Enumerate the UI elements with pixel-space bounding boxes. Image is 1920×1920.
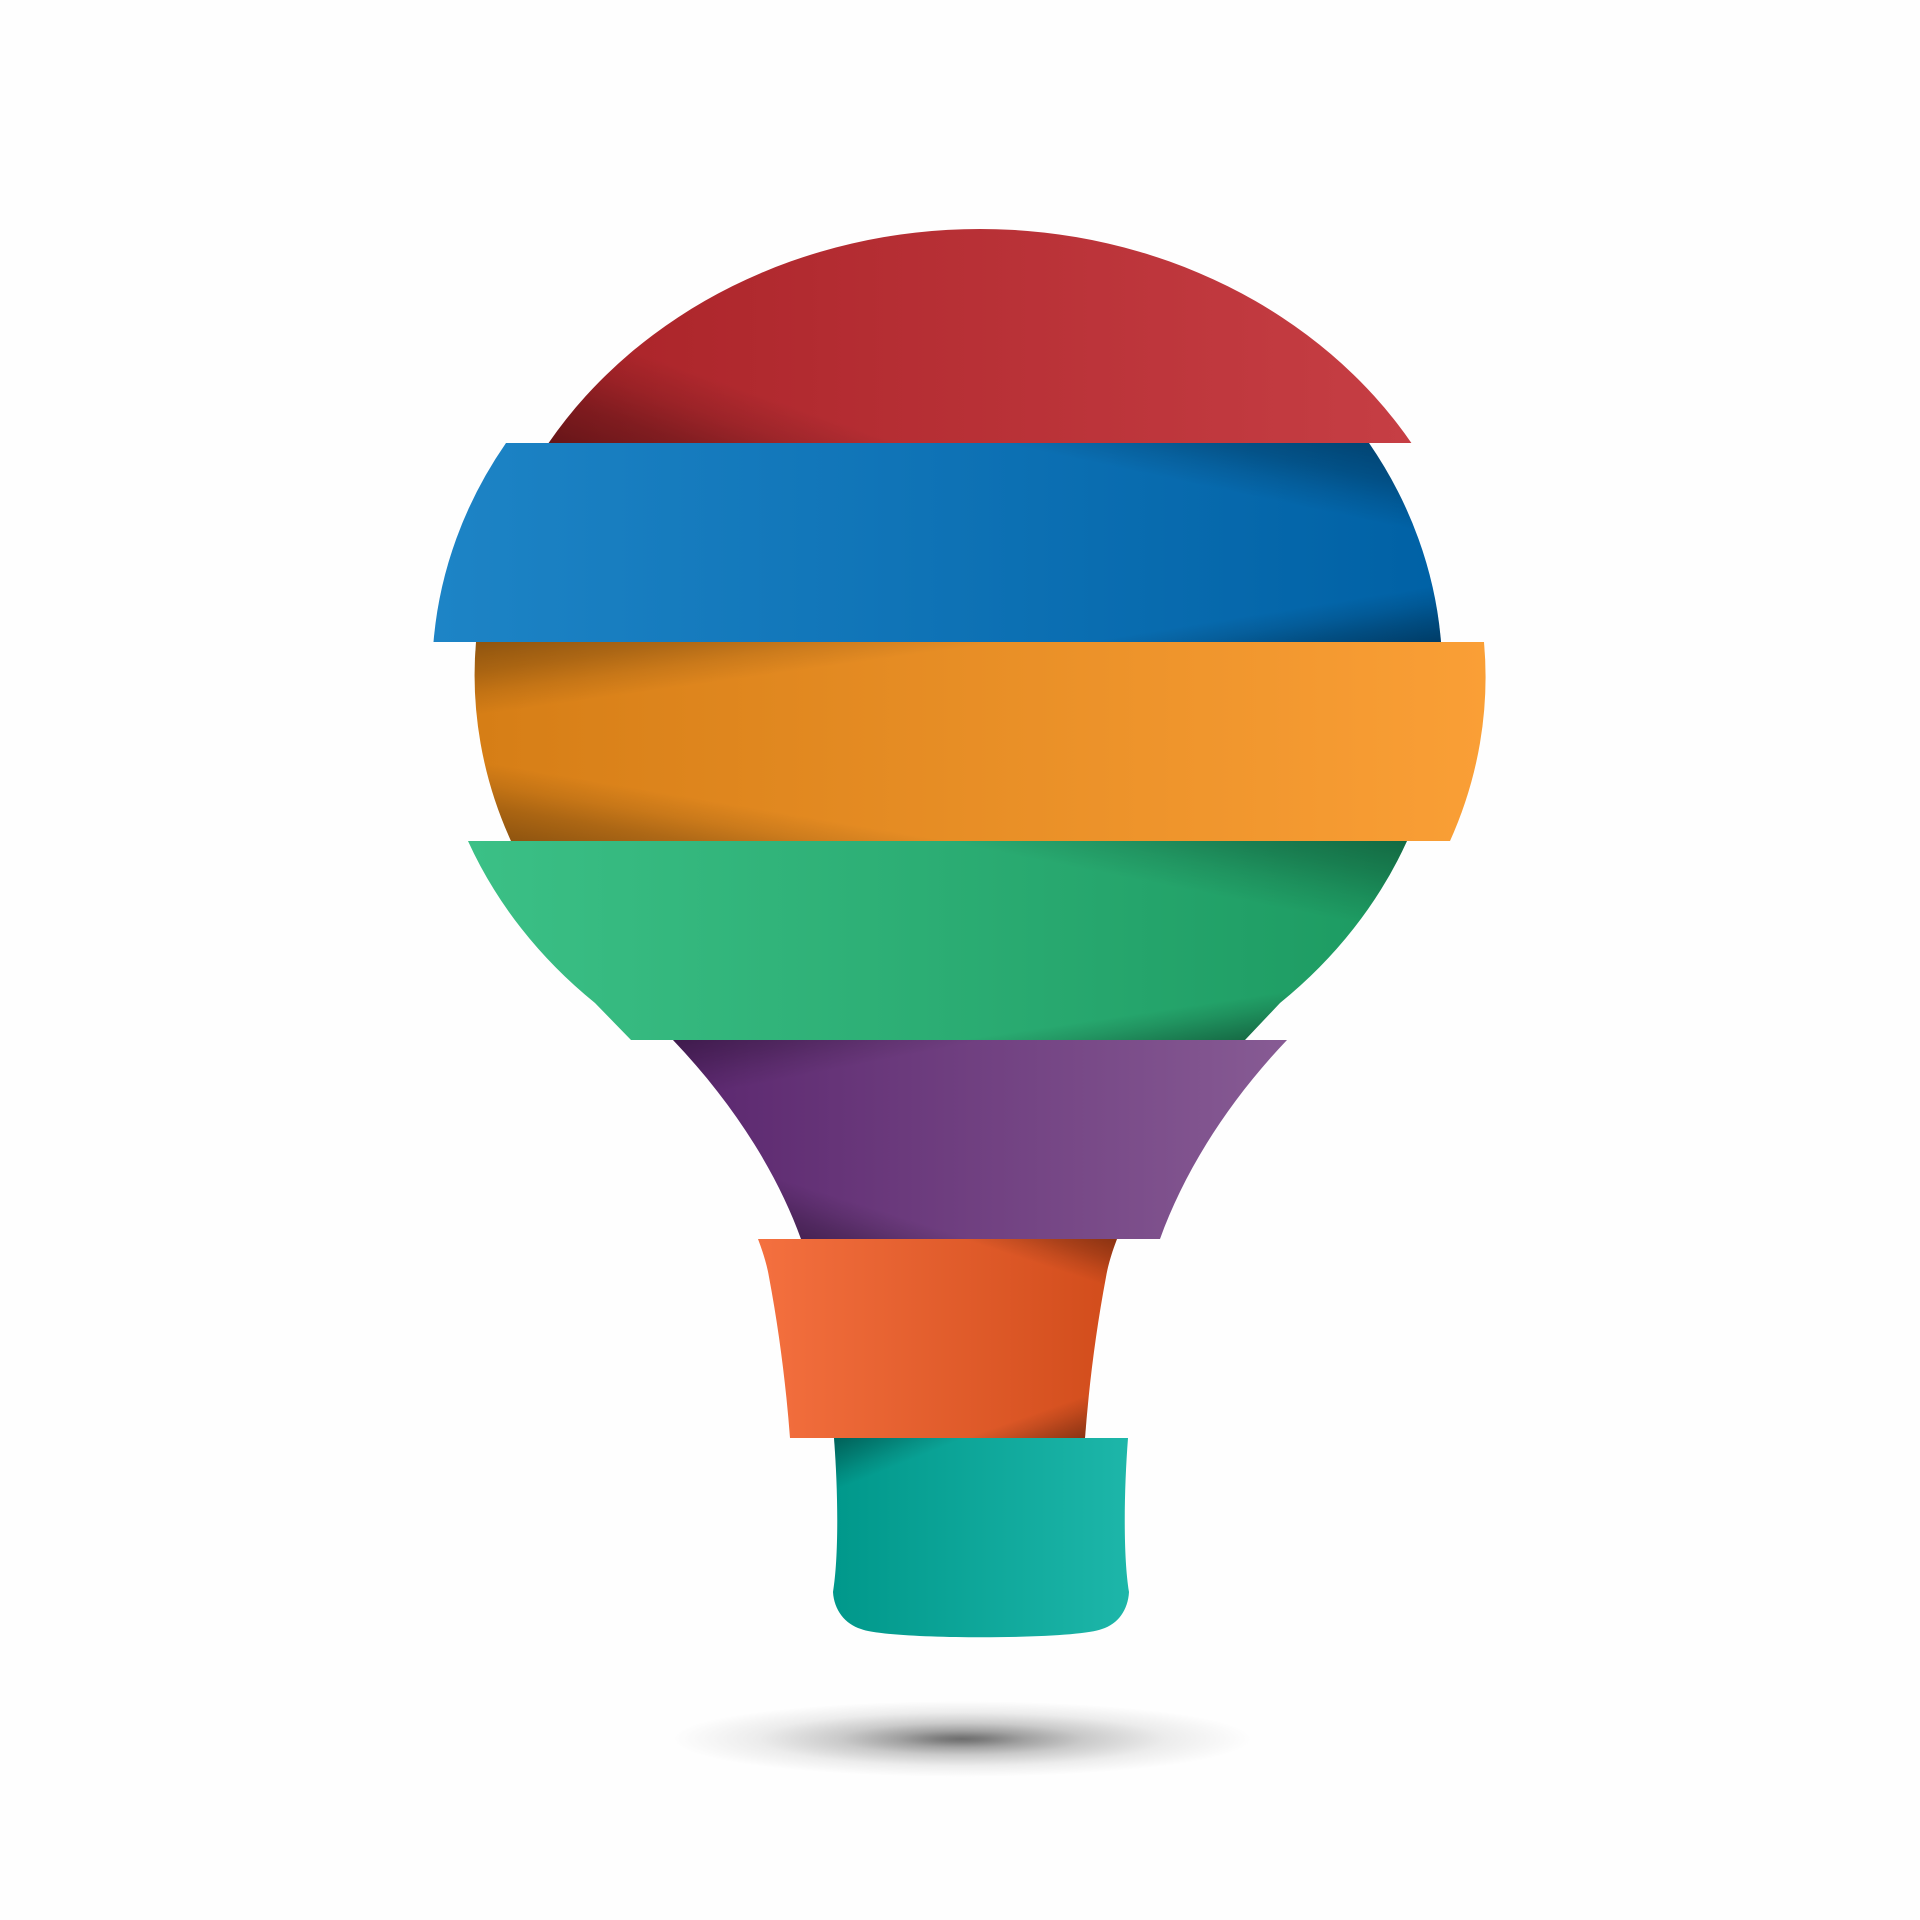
band 2: blue [434, 443, 1441, 642]
band 1: red dome [549, 229, 1411, 443]
floor shadow under the bulb [672, 1701, 1252, 1777]
band 3: orange [475, 642, 1486, 841]
lightbulb made of seven stacked bands [434, 229, 1486, 1637]
band 4: green [468, 841, 1407, 1040]
band 5: purple [673, 1040, 1287, 1239]
band 6: coral orange [758, 1239, 1117, 1438]
band 7: teal base [833, 1438, 1129, 1637]
